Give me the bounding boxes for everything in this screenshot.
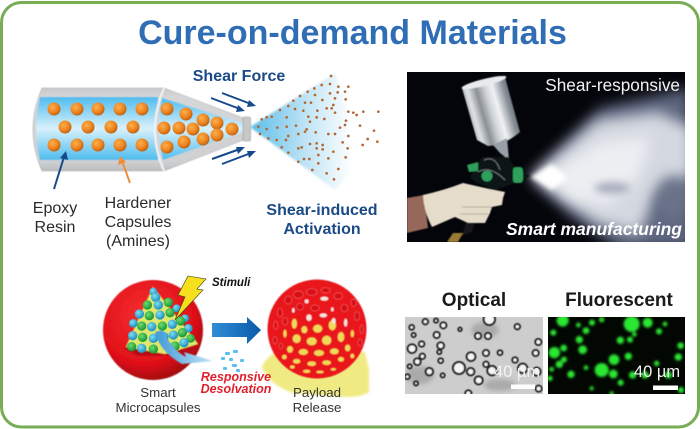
- released payload pool: [262, 352, 369, 397]
- label: shear-induced activation: Shear-induced: [266, 202, 378, 219]
- scale label: 40 µm: 40 µm: [494, 363, 540, 381]
- panel: payload release: [262, 280, 369, 415]
- heading: optical: Optical: [442, 290, 506, 311]
- label: shear force: Shear Force: [193, 68, 285, 85]
- label: responsive desolvation: Responsive: [201, 370, 271, 384]
- label: payload release: Payload: [293, 385, 341, 400]
- micrograph image: [547, 315, 685, 395]
- label: hardener capsules: Hardener: [105, 195, 172, 212]
- label: shear-induced activation: Activation: [283, 221, 361, 238]
- label: stimuli: Stimuli: [212, 277, 251, 289]
- photo background: [407, 72, 685, 242]
- microcapsule sphere: [103, 280, 203, 380]
- spray particles: [257, 75, 380, 181]
- label: responsive desolvation: Desolvation: [201, 382, 272, 396]
- lightning bolt: [175, 276, 206, 320]
- hardener capsules: [48, 102, 238, 154]
- label: hardener capsules: Capsules: [105, 214, 171, 231]
- panel: shear activation diagram: [33, 68, 380, 250]
- label: payload release: Release: [293, 400, 341, 415]
- scale bar: [653, 386, 678, 390]
- title: Cure-on-demand Materials: [138, 14, 567, 52]
- panel: spray gun photo: [407, 72, 695, 250]
- scale label: 40 µm: 40 µm: [634, 363, 680, 381]
- scale bar: [511, 384, 535, 389]
- label: hardener capsules: (Amines): [106, 233, 170, 250]
- panel: smart microcapsules: [103, 276, 251, 415]
- label: epoxy resin: Resin: [35, 219, 75, 236]
- spray cloud: [530, 88, 695, 250]
- released droplets: [221, 350, 244, 372]
- arrow: epoxy resin: [54, 151, 68, 189]
- payload balls: [127, 288, 195, 354]
- arrow: to payload release: [212, 317, 261, 344]
- label: smart microcapsules: Microcapsules: [116, 400, 201, 415]
- desolvation swoosh: [155, 330, 213, 364]
- shear force arrows: [211, 93, 256, 164]
- photo caption: smart manufacturing: Smart manufacturing: [506, 219, 682, 239]
- spray gun: [447, 74, 530, 242]
- panel: optical micrograph: [405, 290, 543, 396]
- gloved hand: [407, 183, 505, 233]
- photo caption: shear-responsive: Shear-responsive: [545, 75, 680, 95]
- syringe body and nozzle: [33, 88, 250, 171]
- arrow: hardener capsules: [118, 156, 130, 183]
- micrograph image: [405, 314, 543, 396]
- heading: fluorescent: Fluorescent: [565, 290, 674, 311]
- panel: fluorescent micrograph: [547, 290, 685, 395]
- spray cone: [250, 73, 352, 190]
- porous red sphere: [268, 280, 366, 378]
- label: epoxy resin: Epoxy: [33, 200, 77, 217]
- label: smart microcapsules: Smart: [140, 385, 176, 400]
